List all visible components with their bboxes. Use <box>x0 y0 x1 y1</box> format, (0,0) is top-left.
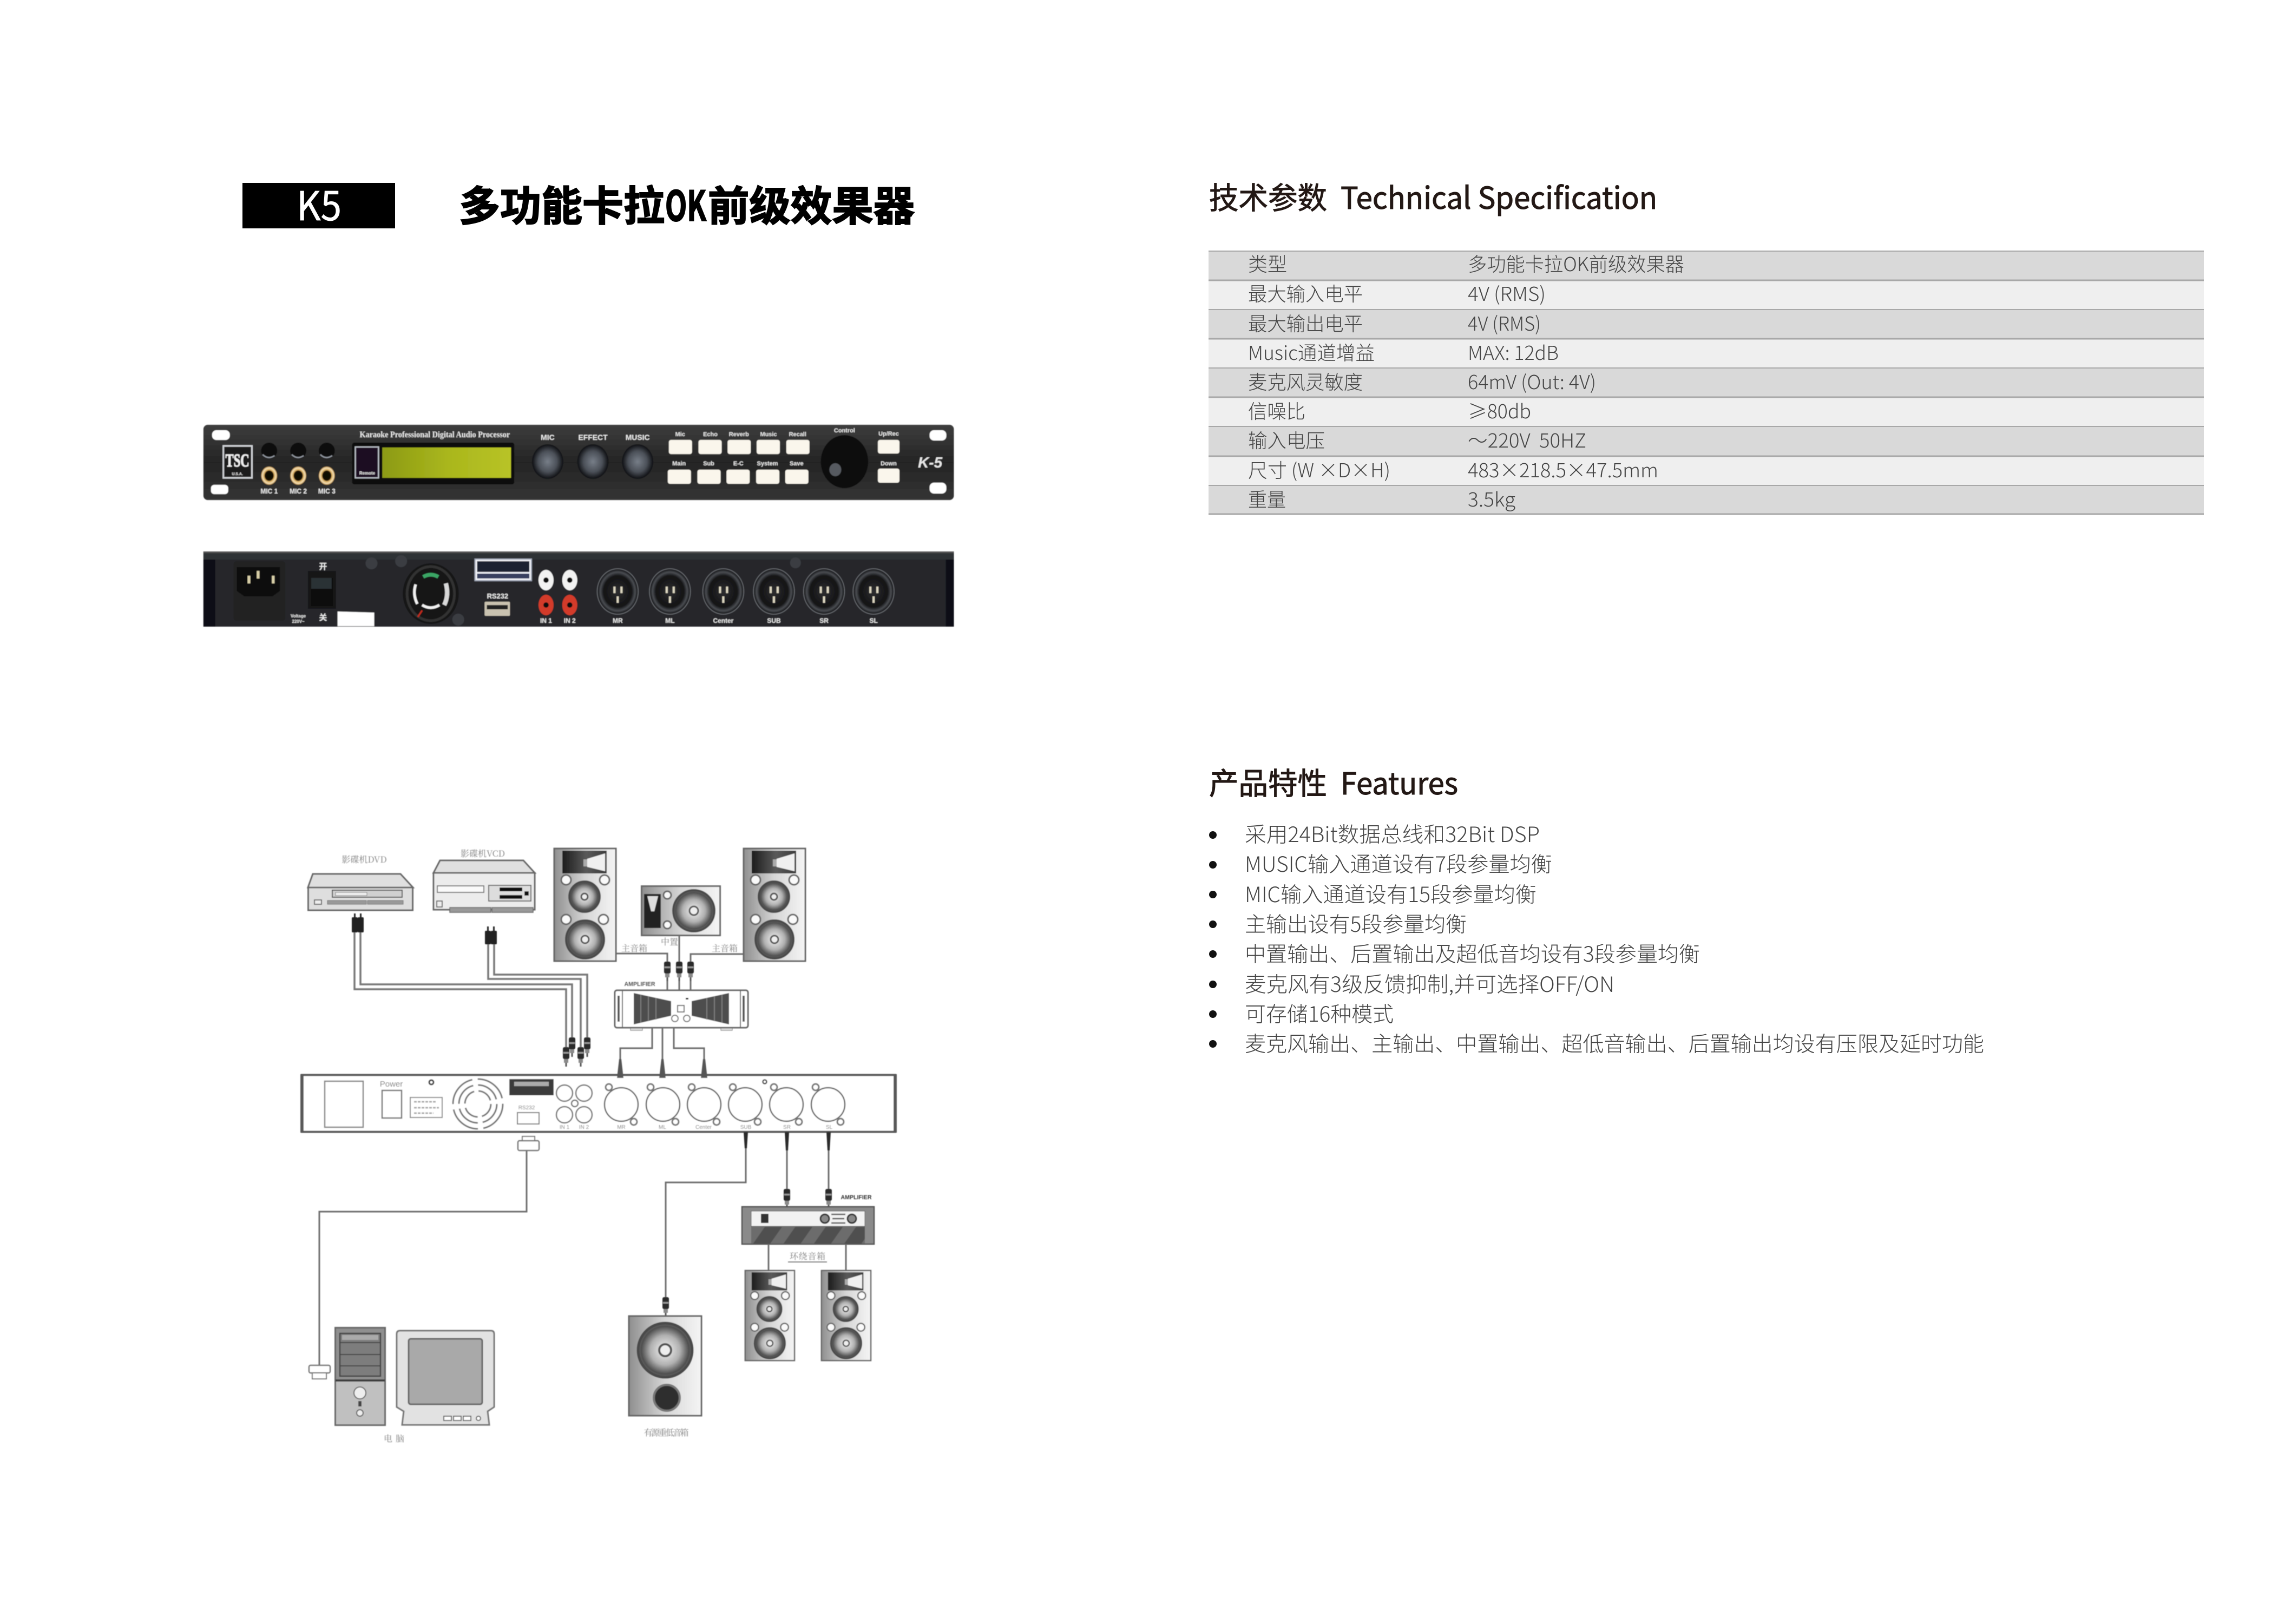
processor rear diagram: IN 2 <box>579 1125 589 1130</box>
power switch: 关 <box>319 612 327 623</box>
processor rear diagram: SUB <box>740 1125 752 1130</box>
XLR outputs: SR <box>819 617 829 624</box>
row: 输入电压 <box>1248 425 1586 453</box>
photo: rear panel of K5 <box>203 551 954 627</box>
speaker to amplifier wiring <box>616 935 743 990</box>
warning label <box>475 559 531 581</box>
product caption: Karaoke Professional Digital Audio Processor <box>360 430 510 439</box>
button labels <box>672 428 899 467</box>
processor rear diagram: RS232 <box>518 1105 535 1111</box>
row: Music通道增益: Music通道增益 <box>1248 338 1375 366</box>
rotary knobs: EFFECT <box>578 433 608 442</box>
main speakers <box>554 849 805 961</box>
row: 最大输出电平 <box>1248 308 1541 337</box>
rack holes <box>211 430 946 494</box>
row: 重量: 重量 <box>1248 484 1286 512</box>
voltage note and white sticker: 220V~ <box>292 619 305 624</box>
row: 信噪比: 信噪比 <box>1248 396 1305 424</box>
active subwoofer: 有源重低音箱 <box>644 1426 688 1438</box>
computer: 电脑 <box>384 1432 404 1444</box>
power switch <box>308 561 336 623</box>
main amplifier: AMPLIFIER <box>625 981 655 988</box>
center speaker <box>642 886 720 948</box>
mic jacks: MIC 1 <box>260 487 278 495</box>
surround amplifier: AMPLIFIER <box>841 1194 872 1201</box>
voltage note and white sticker: Voltage <box>291 614 306 619</box>
mic jacks: MIC 3 <box>318 487 336 495</box>
VCD player <box>434 847 535 912</box>
main speakers: 主音箱 <box>621 942 647 954</box>
TSC logo: U.S.A. <box>232 472 243 476</box>
model badge K5 <box>242 174 395 232</box>
connection diagram <box>300 847 897 1444</box>
surround wiring and caption: 环绕音箱 <box>790 1250 825 1262</box>
model badge K5: K5 <box>297 174 342 232</box>
screws <box>365 555 801 626</box>
row: 输入电压: 输入电压 <box>1248 425 1325 453</box>
XLR outputs <box>597 569 894 624</box>
row: 类型: 类型 <box>1248 249 1287 277</box>
row: 麦克风灵敏度: 麦克风灵敏度 <box>1248 367 1363 395</box>
main speakers: 主音箱 <box>712 942 738 954</box>
button labels: Recall <box>789 431 806 438</box>
feature 7: 可存储16种模式 <box>1245 998 1394 1028</box>
feature 3: MIC输入通道设有15段参量均衡 <box>1245 878 1537 909</box>
feature 6: 麦克风有3级反馈抑制,并可选择OFF/ON <box>1245 968 1614 998</box>
feature 2: MUSIC输入通道设有7段参量均衡 <box>1245 848 1552 878</box>
row: Music通道增益: MAX: 12dB <box>1468 338 1559 366</box>
processor rear diagram: SL <box>826 1125 833 1130</box>
XLR plugs on processor top <box>617 1059 707 1078</box>
plugs on player cables <box>352 913 590 1067</box>
row: 最大输入电平 <box>1248 279 1546 307</box>
TSC logo <box>224 446 252 478</box>
feature 1: 采用24Bit数据总线和32Bit DSP <box>1245 818 1540 849</box>
function buttons <box>668 440 899 484</box>
button labels: Mic <box>675 431 685 438</box>
XLR outputs: ML <box>665 617 674 624</box>
VCD player: 影碟机VCD <box>461 847 505 859</box>
button labels: Music <box>760 431 777 438</box>
heading: technical specification: 技术参数 <box>1209 174 1327 218</box>
title: OK <box>665 173 707 233</box>
amplifier plugs <box>664 962 694 981</box>
row: 尺寸: 483×218.5×47.5mm <box>1468 455 1658 483</box>
surround speakers <box>745 1271 871 1360</box>
row: 重量: 3.5kg <box>1468 484 1515 512</box>
row: 麦克风灵敏度 <box>1248 367 1596 395</box>
feature 5: 中置输出、后置输出及超低音均设有3段参量均衡 <box>1245 938 1700 968</box>
heading: features: 产品特性 <box>1209 760 1327 804</box>
active subwoofer <box>629 1316 701 1438</box>
button labels: Down <box>881 461 897 467</box>
rotary knobs <box>532 433 653 479</box>
row: 重量 <box>1248 484 1515 512</box>
processor rear diagram: SR <box>783 1125 791 1130</box>
DVD player: 影碟机DVD <box>342 853 387 865</box>
mic jacks <box>260 443 336 495</box>
rotary knobs: MIC <box>541 433 555 442</box>
RS232 port: RS232 <box>487 592 508 600</box>
processor rear diagram: IN 1 <box>560 1125 570 1130</box>
processor rear diagram: Center <box>695 1125 712 1130</box>
cooling fan <box>403 563 459 624</box>
processor rear diagram <box>300 1074 897 1133</box>
row: 输入电压: ～220V 50HZ <box>1468 425 1586 453</box>
heading: features <box>1209 760 1458 804</box>
row: 类型 <box>1248 249 1684 277</box>
row: 信噪比 <box>1248 396 1531 424</box>
rotary knobs: MUSIC <box>626 433 650 442</box>
USB cable to computer <box>309 1136 539 1379</box>
row: 最大输入电平: 4V (RMS) <box>1468 279 1546 307</box>
mic jacks: MIC 2 <box>290 487 307 495</box>
RCA inputs: IN 1 <box>540 617 552 624</box>
button labels: Control <box>834 428 855 434</box>
power inlet <box>234 561 285 621</box>
row: 最大输出电平: 最大输出电平 <box>1248 308 1363 337</box>
heading: features: Features <box>1341 760 1458 804</box>
button labels: Main <box>672 461 686 467</box>
button labels: Save <box>790 461 804 467</box>
surround wiring and caption <box>769 1244 846 1270</box>
button labels: System <box>757 461 778 467</box>
processor rear diagram: MR <box>617 1125 626 1130</box>
button labels: Sub <box>703 461 714 467</box>
TSC logo: TSC <box>226 451 249 471</box>
XLR outputs: MR <box>613 617 623 624</box>
amplifier to processor wiring <box>620 1028 704 1061</box>
row: 麦克风灵敏度: 64mV (Out: 4V) <box>1468 367 1596 395</box>
computer <box>336 1328 494 1444</box>
cables from players to processor <box>354 932 587 1050</box>
control wheel <box>821 435 868 488</box>
feature 4: 主输出设有5段参量均衡 <box>1245 908 1467 938</box>
voltage note and white sticker <box>291 612 374 626</box>
feature 8: 麦克风输出、主输出、中置输出、超低音输出、后置输出均设有压限及延时功能 <box>1245 1028 1984 1058</box>
DVD player <box>308 853 413 910</box>
RCA inputs: IN 2 <box>564 617 576 624</box>
RS232 port <box>484 592 510 616</box>
button labels: Echo <box>703 431 718 438</box>
XLR outputs: Center <box>713 617 734 624</box>
power switch: 开 <box>319 561 327 572</box>
button labels: Reverb <box>729 431 749 438</box>
title: 前级效果器 <box>708 173 915 233</box>
row: 最大输出电平: 4V (RMS) <box>1468 308 1541 337</box>
lower cables <box>666 1147 829 1316</box>
XLR outputs: SL <box>869 617 878 624</box>
model mark K-5: K-5 <box>918 454 943 471</box>
bullets <box>1209 831 1217 1048</box>
title: 多功能卡拉 <box>459 173 665 233</box>
title <box>459 173 915 233</box>
RCA inputs <box>539 570 577 624</box>
surround amplifier <box>742 1194 874 1244</box>
features list <box>1209 818 1984 1058</box>
row: 最大输入电平: 最大输入电平 <box>1248 279 1363 307</box>
plugs under processor <box>662 1132 832 1317</box>
row: Music通道增益 <box>1248 338 1559 366</box>
row: 信噪比: ≥80db <box>1468 396 1531 424</box>
row: 尺寸: 尺寸 (W ×D×H) <box>1248 455 1390 483</box>
processor rear diagram: Power <box>380 1080 403 1089</box>
photo: front panel of K5 <box>203 425 954 500</box>
LCD display: Remote <box>359 471 376 476</box>
heading: technical specification <box>1209 174 1657 218</box>
heading: technical specification: Technical Specification <box>1341 174 1657 218</box>
button labels: E-C <box>733 461 744 467</box>
LCD display <box>352 443 514 484</box>
center speaker: 中置 <box>661 935 678 948</box>
main amplifier <box>615 981 748 1030</box>
processor rear diagram: ML <box>659 1125 666 1130</box>
specification table <box>1209 249 2204 515</box>
table rows <box>1209 251 2204 515</box>
row: 尺寸 <box>1248 455 1658 483</box>
XLR outputs: SUB <box>767 617 781 624</box>
row: 类型: 多功能卡拉OK前级效果器 <box>1468 249 1684 277</box>
button labels: Up/Rec <box>878 431 899 437</box>
